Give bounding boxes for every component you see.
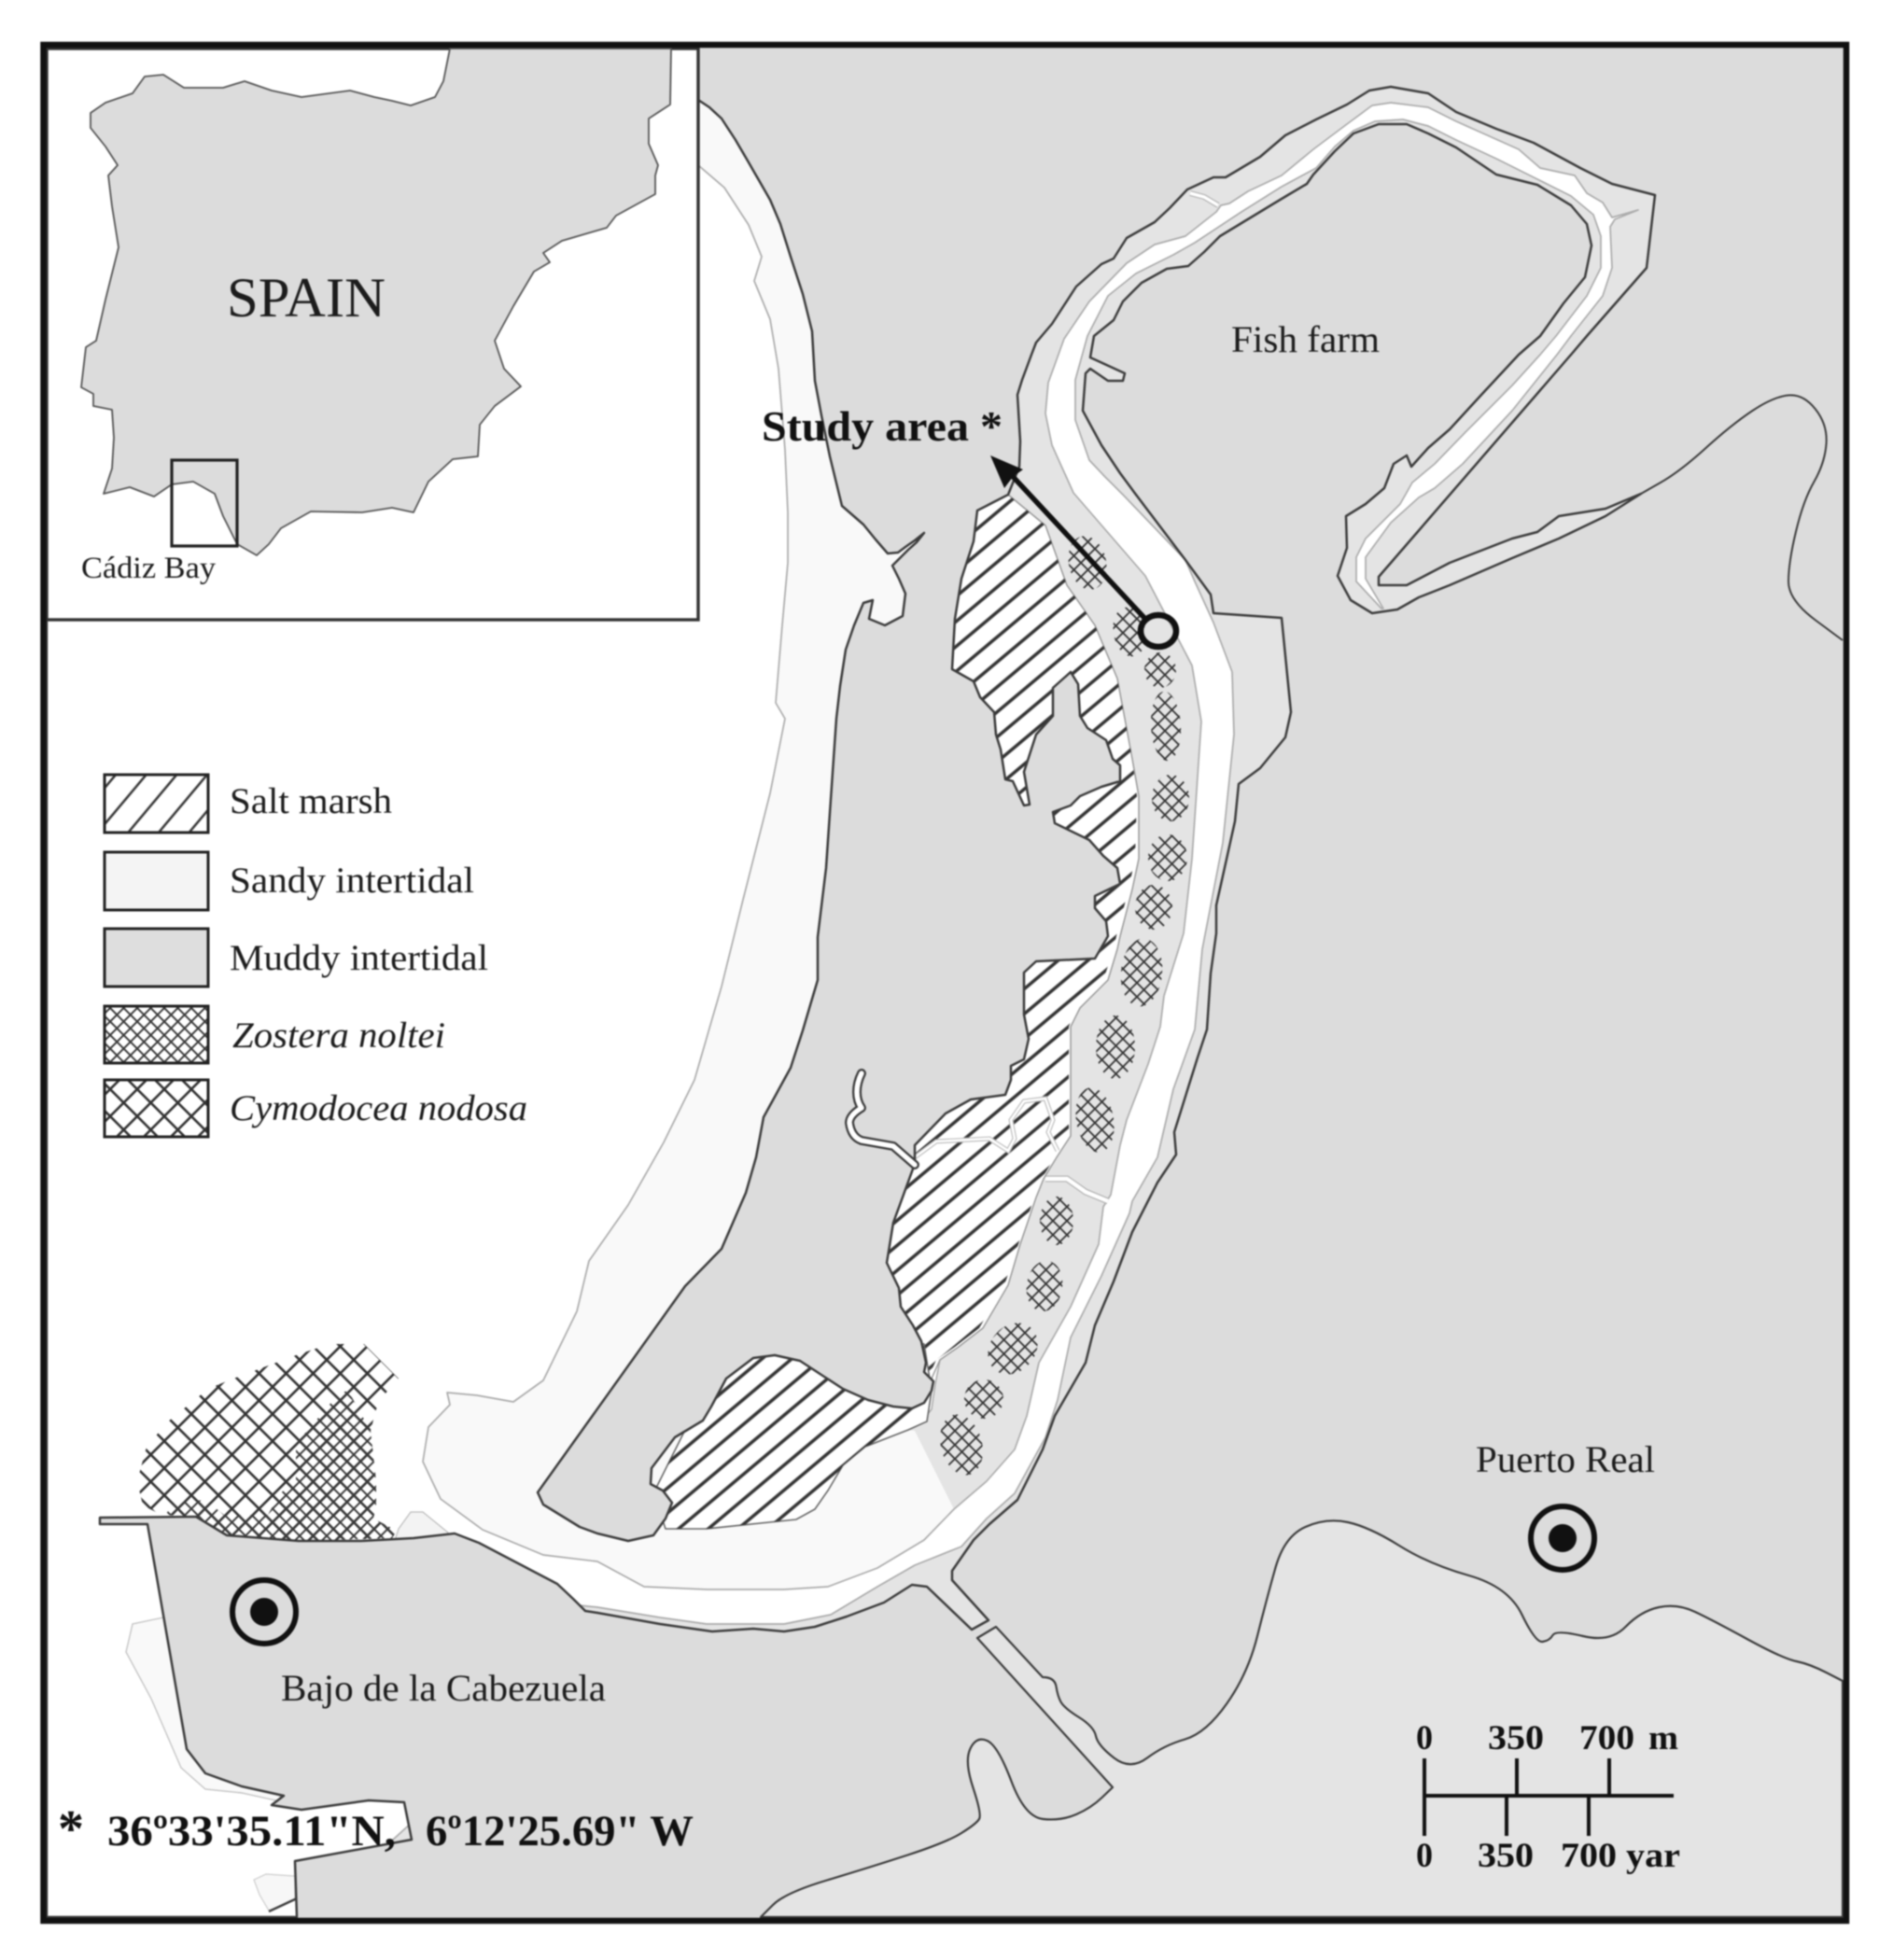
boundary line east of fish farm	[1641, 395, 1843, 640]
icon: Puerto Real marker	[1531, 1506, 1594, 1570]
jetty detail line	[269, 1898, 297, 1911]
legend: Cymodocea nodosa: Cymodocea nodosa	[230, 1088, 527, 1128]
arrow to study area	[990, 455, 1176, 647]
legend: salt marsh	[105, 775, 392, 833]
legend: muddy intertidal	[105, 929, 488, 987]
scale bar: m	[1648, 1719, 1678, 1757]
legend	[105, 775, 527, 1137]
white strip beside marsh	[928, 1361, 941, 1413]
intertidal zones and water	[47, 87, 1655, 1917]
legend: Cymodocea nodosa	[105, 1080, 527, 1137]
legend: Zostera noltei	[105, 1006, 445, 1063]
scale bar: yar	[1626, 1837, 1680, 1875]
legend: muddy intertidal: Muddy intertidal	[230, 938, 488, 978]
scale bar: 0	[1416, 1719, 1433, 1757]
scale bar	[1416, 1719, 1680, 1875]
legend: sandy intertidal	[105, 852, 474, 910]
coastline outlines	[47, 87, 1655, 1917]
scale bar: 0	[1416, 1837, 1433, 1875]
scale bar: 350	[1488, 1719, 1544, 1757]
legend: Zostera noltei: Zostera noltei	[232, 1015, 445, 1056]
salt marsh north	[888, 495, 1141, 1379]
icon: Bajo de la Cabezuela marker	[232, 1580, 296, 1644]
tidal creeks	[1045, 1179, 1108, 1201]
label: SPAIN: SPAIN	[227, 267, 386, 329]
salt marsh south	[655, 1342, 933, 1531]
coordinates note: 36º33'35.11"N,	[107, 1807, 396, 1855]
inset: Iberian Peninsula	[47, 49, 698, 620]
Zostera noltei patches	[940, 536, 1189, 1475]
coordinates note	[58, 1800, 694, 1858]
coordinates note: 6º12'25.69" W	[426, 1807, 694, 1855]
label: Bajo de la Cabezuela: Bajo de la Cabezuela	[281, 1667, 606, 1709]
Cymodocea nodosa meadow	[137, 1344, 399, 1541]
coordinates note: *	[58, 1800, 84, 1858]
label: Fish farm: Fish farm	[1231, 318, 1380, 360]
sandy intertidal spit	[423, 93, 954, 1589]
Zostera noltei meadow	[165, 1391, 397, 1541]
creek meanders in marsh	[915, 1099, 1058, 1157]
white open water and channel	[47, 103, 1638, 1917]
Cádiz locator box	[172, 460, 237, 546]
label: Study area: Study area *	[762, 402, 1003, 450]
scale bar: 700	[1579, 1719, 1634, 1757]
winding creek	[849, 1073, 915, 1165]
legend: salt marsh: Salt marsh	[230, 781, 392, 821]
scale bar: 700	[1561, 1837, 1617, 1875]
bay water body bottom right	[761, 1520, 1843, 1917]
scale bar: 350	[1478, 1837, 1534, 1875]
legend: sandy intertidal: Sandy intertidal	[230, 861, 474, 901]
small sand patches	[395, 1510, 449, 1538]
label: Cádiz Bay: Cádiz Bay	[81, 552, 217, 585]
label: Puerto Real: Puerto Real	[1476, 1438, 1655, 1480]
Iberia land	[81, 49, 671, 555]
